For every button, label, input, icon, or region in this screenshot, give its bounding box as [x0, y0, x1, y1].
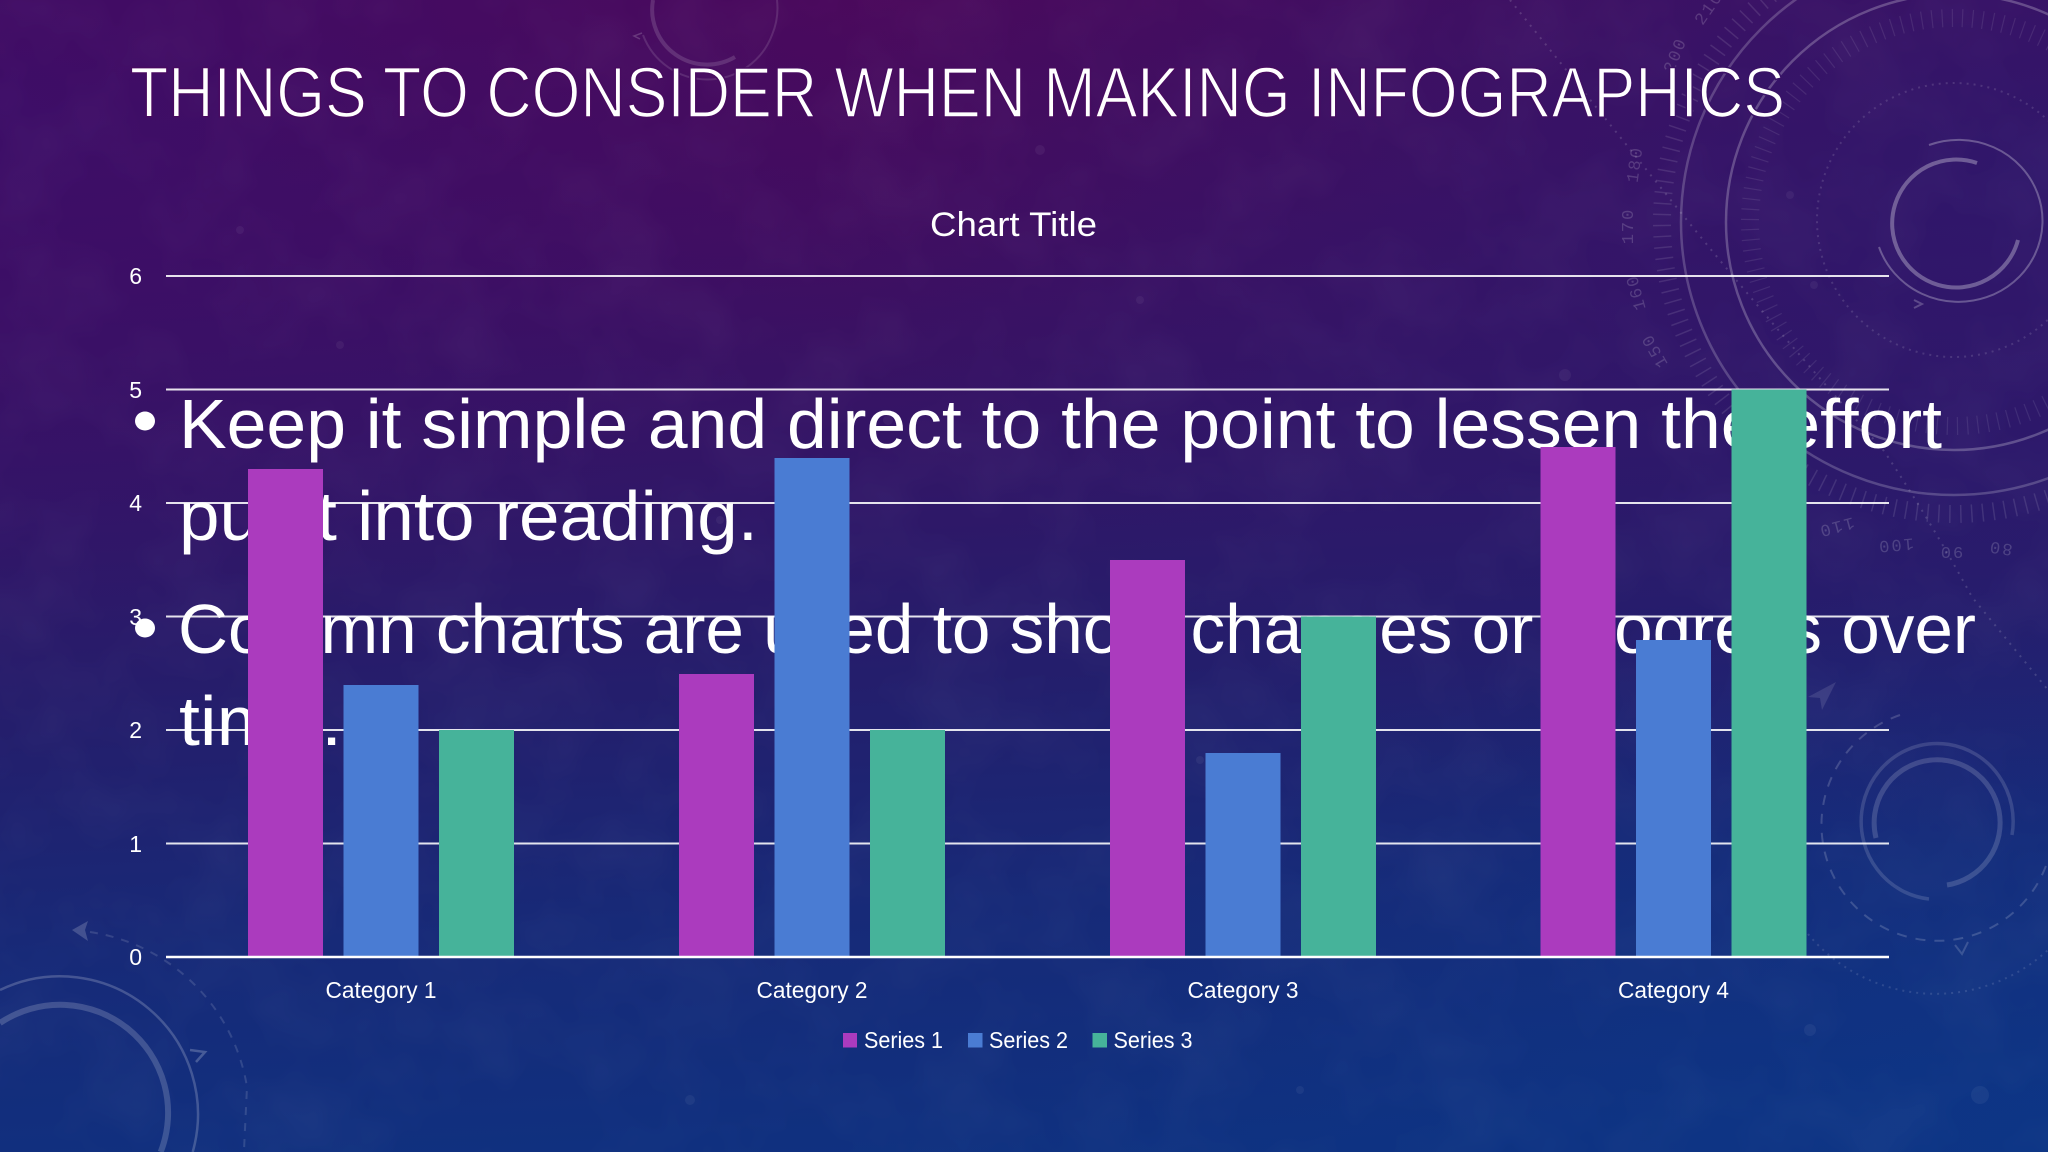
decoration: dial numbers: 200: [1661, 35, 1692, 76]
decoration: dial numbers: 80: [1987, 535, 2014, 558]
bars: category 2: [679, 458, 945, 957]
y axis labels: 3: [129, 604, 142, 630]
title: THINGS TO CONSIDER WHEN MAKING INFOGRAPHICS: [130, 54, 1785, 133]
decoration: lower right rings: [1808, 682, 2048, 994]
category labels: Category 2: [756, 977, 868, 1003]
bars: category 1: [248, 469, 514, 957]
bars: category 4: [1540, 390, 1806, 957]
category labels: Category 3: [1188, 977, 1298, 1003]
body text: bullet list: [135, 385, 1976, 760]
column chart: [129, 206, 1889, 1053]
y axis labels: 4: [129, 490, 142, 516]
legend: Series 1: [864, 1027, 943, 1053]
legend: [843, 1027, 1192, 1053]
decoration: dial numbers: 170: [1620, 208, 1639, 244]
category labels: [326, 977, 1729, 1003]
decoration: top centre rings: [634, 0, 777, 79]
x axis line: [166, 956, 1889, 958]
legend: Series 2: [989, 1027, 1068, 1053]
decoration: top right dial: [1510, 0, 2048, 690]
y axis labels: 5: [129, 377, 142, 403]
decoration: dial numbers: 100: [1876, 532, 1914, 555]
gridlines: [166, 276, 1889, 844]
decoration: dial numbers: 160: [1624, 272, 1652, 312]
bullet two: time.: [179, 682, 342, 760]
y axis labels: 6: [129, 263, 142, 289]
bullet two: Column charts are used to show changes or progress over: [178, 590, 1976, 668]
decoration: dial numbers: 110: [1816, 511, 1856, 539]
decoration: dial numbers: 90: [1939, 541, 1963, 560]
bullet one: Keep it simple and direct to the point to lessen the effort: [179, 385, 1942, 463]
decoration: dial numbers: [1620, 0, 2014, 560]
y axis labels: [129, 263, 142, 970]
bars: category 3: [1110, 560, 1376, 957]
y axis labels: 2: [129, 717, 142, 743]
legend: Series 3: [1114, 1027, 1192, 1053]
bullet two: [135, 590, 1976, 760]
bullet one: put it into reading.: [179, 477, 758, 555]
category labels: Category 4: [1618, 977, 1729, 1003]
decoration: dial numbers: 150: [1639, 329, 1673, 370]
y axis labels: 0: [129, 944, 142, 970]
chart title: Chart Title: [930, 206, 1097, 244]
decoration: lower left rings: [0, 921, 247, 1152]
bullet one: [135, 385, 1942, 555]
y axis labels: 1: [129, 831, 142, 857]
category labels: Category 1: [326, 977, 436, 1003]
decoration: dial numbers: 180: [1625, 145, 1648, 184]
